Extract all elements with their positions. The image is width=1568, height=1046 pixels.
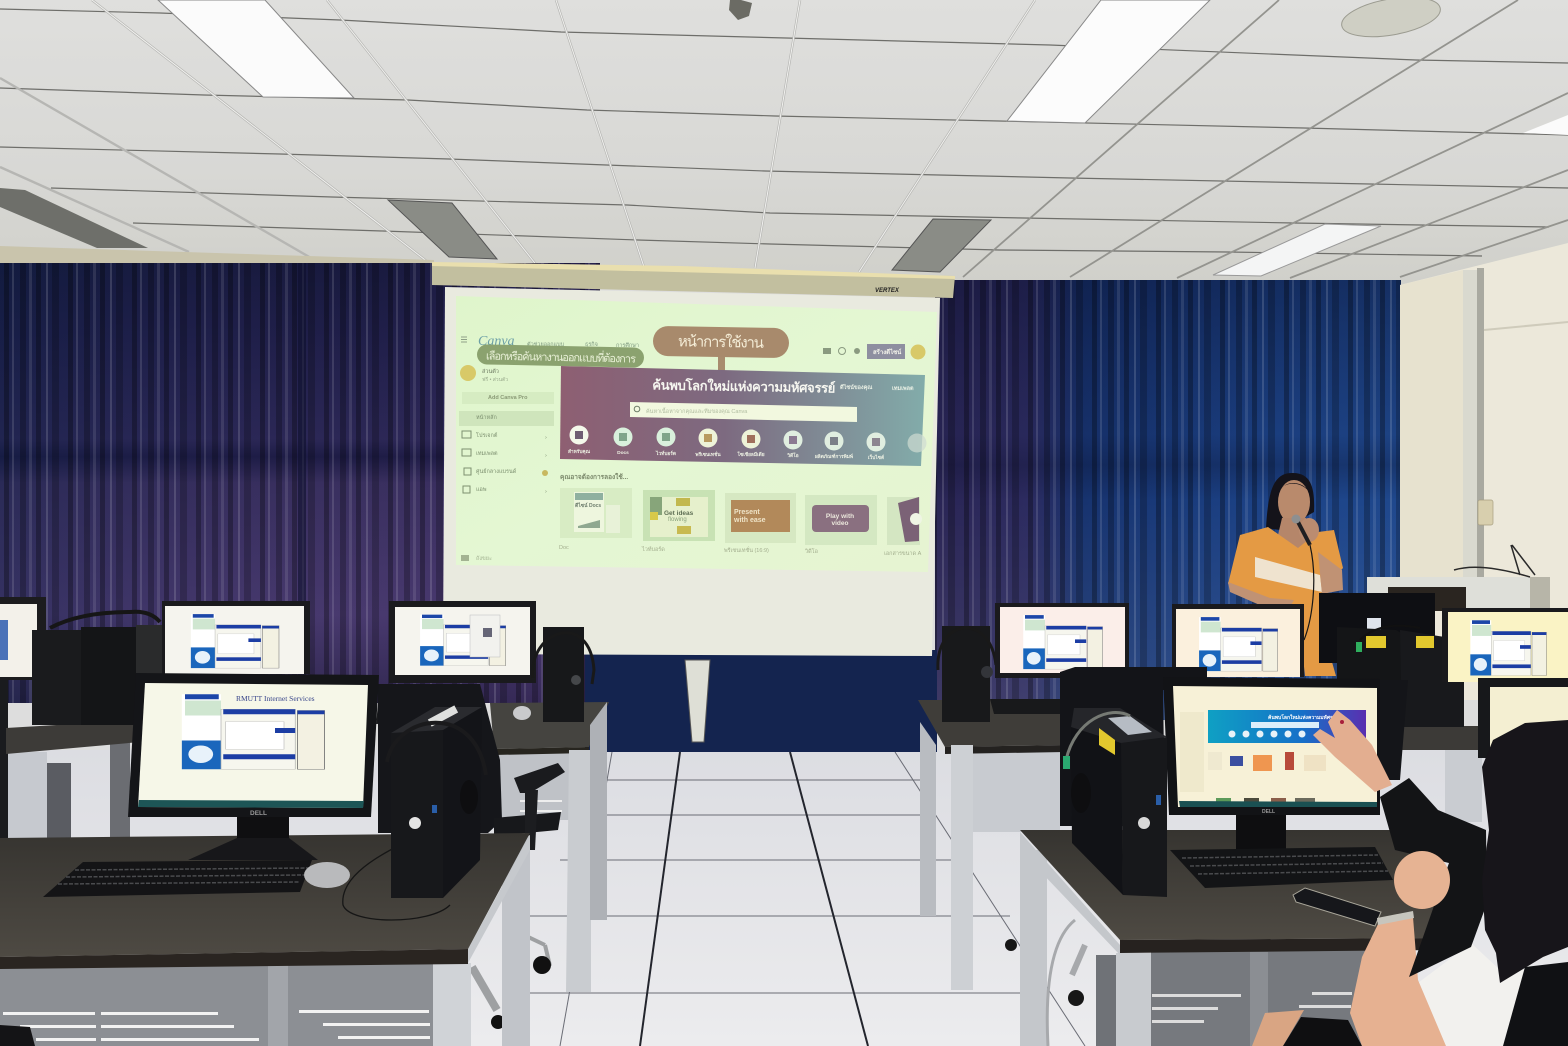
monitor: back left 1 [162,601,310,674]
monitor screen [1173,686,1377,807]
raised hand [1313,710,1392,792]
category labels: วิดีโอ [787,452,799,459]
presenter right arm [1318,552,1343,594]
category labels: ผลิตภัณฑ์การพิมพ์ [815,453,853,460]
ceiling grid bars right [963,0,1568,278]
chair back [1503,962,1568,1046]
sidebar profile: Add Canva Pro [488,395,528,401]
chair casters [503,925,550,966]
wall thermostat [1478,500,1493,525]
cabinet panel [1151,950,1381,1046]
black chair front right [1060,667,1408,826]
desk side leg [502,835,530,1046]
hero small links: เทมเพลต [892,385,914,392]
panel slots [3,1010,430,1041]
monitor: back right 1 [995,603,1129,678]
towers back right [1337,626,1464,727]
microphone cable [1304,545,1314,640]
tower front right [1063,708,1167,897]
search bar [630,402,857,422]
category labels: สำหรับคุณ [568,448,591,455]
headset [1066,713,1130,760]
projector screen housing [432,262,955,298]
monitor screen [138,683,368,808]
back left panel behind chair [494,752,569,820]
monitor stand [1236,812,1286,850]
category labels: พรีเซนเทชั่น [694,450,721,458]
hero small links [840,383,914,392]
presenter hair [1266,473,1314,530]
top right icons: สร้างดีไซน์ [873,348,902,356]
sidebar menu: โปรเจกต์ [476,431,498,439]
VERTEX brand: VERTEX [875,288,900,294]
back right desk [918,700,1482,990]
card captions: Doc [559,545,569,551]
template cards: video [832,520,849,527]
top navigation: ตัวช่วยออกแบบ [527,341,565,348]
mouse back left [513,706,531,720]
dell logo [409,817,421,829]
template cards [560,488,922,545]
mouse front left [304,862,350,888]
hero small links: ดีไซน์ของคุณ [840,383,873,391]
sidebar menu: ถังขยะ [476,555,492,562]
hero icons [1228,730,1306,738]
sidebar menu: แอพ [476,487,487,493]
sidebar menu [459,411,554,562]
curtain rail [0,246,434,268]
template cards: flowing [668,517,687,523]
upper arm [1350,917,1446,1046]
phone on desk [1293,888,1381,926]
brown callout: usage page [653,326,789,358]
right curtain [935,280,1401,720]
bracelet [1377,911,1414,925]
fist [1394,851,1450,909]
front right desk [1005,830,1442,1046]
green callout: choose or search [477,344,644,368]
DELL logo: DELL [250,810,267,817]
chair armrest [514,763,565,793]
top navigation: ธุรกิจ [585,341,598,348]
panel slots [1152,992,1352,1023]
sidebar profile [460,365,554,404]
light panel 3 [1213,224,1381,276]
skirt [1283,1017,1362,1046]
ceiling speaker [1339,0,1443,43]
yellow stickers [1366,636,1386,648]
DELL logo: DELL [1262,809,1275,815]
template cards: Get ideas [664,510,694,517]
monitor: far left [0,597,46,680]
towers back left [32,612,162,725]
projection screen [443,287,940,656]
cabinet panel [0,960,435,1046]
dell logo [1138,817,1150,829]
back left desk [6,702,609,992]
desk legs [1020,850,1047,1046]
Canva logo: Canva [478,334,515,349]
presenter face [1278,480,1310,524]
black jacket bundle [1380,778,1487,977]
presenter [1228,473,1343,676]
card captions: พรีเซนเทชั่น (16:9) [724,546,769,554]
ceiling fixture [729,0,752,20]
light panel 4 [1523,115,1568,135]
keyboard back right [990,699,1062,714]
hand with microphone [1299,518,1319,542]
light panel 1 [158,0,354,98]
desk top [0,833,530,957]
sidebar menu: เทมเพลต [476,451,498,457]
card captions [559,545,922,557]
category labels: โซเชียลมีเดีย [736,451,765,458]
mouse cable [343,845,450,920]
template thumbnails [1208,752,1326,806]
air vent 2 [892,219,991,272]
projected Canva page [456,296,937,572]
suggestions heading: คุณอาจต้องการลองใช้... [560,472,628,481]
template cards: ดีไซน์ Docs [575,502,601,509]
air vent 3 [0,188,148,248]
hamburger icon [461,337,467,342]
foreground chair corner [0,1025,35,1046]
back left panels [0,680,130,840]
tower front left [387,705,486,898]
taskbar [138,800,364,808]
category icons [570,426,926,452]
template cards: Play with [826,513,854,520]
sidebar menu: › [545,453,547,459]
caster [1072,945,1085,975]
top navigation: การศึกษา [616,342,639,349]
light panel 2 [1007,0,1210,123]
floor [0,750,1568,1046]
taskbar [1179,801,1377,807]
podium stand [685,660,710,742]
category labels: Docs [617,450,629,456]
hero headline: ค้นพบโลกใหม่แห่งความมหัศจรรย์ [652,376,835,396]
RMUTT heading: RMUTT Internet Services [236,694,315,703]
ceiling grid bars left [0,0,1035,272]
sidebar menu: หน้าหลัก [476,414,497,421]
category labels: เว็บไซต์ [868,453,884,461]
monitor: front right [1163,677,1380,850]
lower curtain under screen [585,650,937,752]
front left desk [0,833,530,1046]
monitor: right partial [1478,678,1568,758]
sidebar [1180,712,1204,792]
search bar: ค้นหาเนื้อหาจากคุณและทีมของคุณ Canva [646,407,748,415]
ceiling [0,0,1568,285]
sidebar profile: ส่วนตัว [482,368,499,375]
sidebar profile: ฟรี • ส่วนตัว [482,376,508,383]
template cards: with ease [733,517,766,524]
ceiling tile seams [0,9,1568,256]
category labels [568,448,884,461]
card captions: วิดีโอ [804,547,818,555]
air vent 1 [388,200,497,259]
template cards: Present [734,509,760,516]
keyboard back left [376,704,430,724]
stem of callout [718,355,725,381]
black chair front left [378,684,565,1029]
white machine at rear [1367,545,1550,611]
green callout: choose or search: เลือกหรือค้นหางานออกแบบที่ต้องการ [486,347,636,366]
monitor: back left 2 [389,601,536,683]
card captions: เอกสารขนาด A [884,550,922,557]
left curtain [0,263,600,703]
sidebar menu: › [545,489,547,495]
category labels: ไวท์บอร์ด [655,450,676,457]
keyboard front left [43,860,312,897]
monitor: front left [128,673,379,860]
yellow sticker [1099,728,1115,755]
white shirt [1418,943,1568,1046]
presenter dress [1228,527,1343,676]
hero text: ค้นพบโลกใหม่แห่งความมหัศจรรย์ [1268,714,1341,721]
presenter neck [1278,518,1308,550]
monitor: back right 2 [1172,604,1304,677]
desk edge [1120,938,1442,953]
keyboard front right [1170,847,1393,888]
tower with headset back left [533,627,594,722]
black rear monitor [1319,593,1435,663]
hair [1482,720,1568,983]
brown callout: usage page: หน้าการใช้งาน [678,332,764,352]
headset [387,723,486,775]
top right icons [823,344,926,360]
seated woman [1252,710,1568,1046]
top navigation [527,341,639,349]
Canva hero in blue [1208,710,1366,743]
chair seat [494,812,561,836]
wall and pillar [1400,243,1568,700]
leg [1252,1010,1304,1046]
desk top [1020,830,1442,940]
dress white band [1255,557,1322,592]
sidebar menu: › [545,435,547,441]
sidebar menu: ศูนย์กลางแบรนด์ [476,468,517,475]
hero banner [560,366,925,466]
presenter left arm [1228,582,1294,607]
tower with headset back right [938,626,996,722]
grey cable [1047,920,1075,1046]
desk edge [0,949,468,969]
monitor stand [237,815,289,855]
card captions: ไวท์บอร์ด [641,546,665,553]
cables on machine [1454,545,1535,577]
monitor: back right 3 [1442,608,1568,682]
